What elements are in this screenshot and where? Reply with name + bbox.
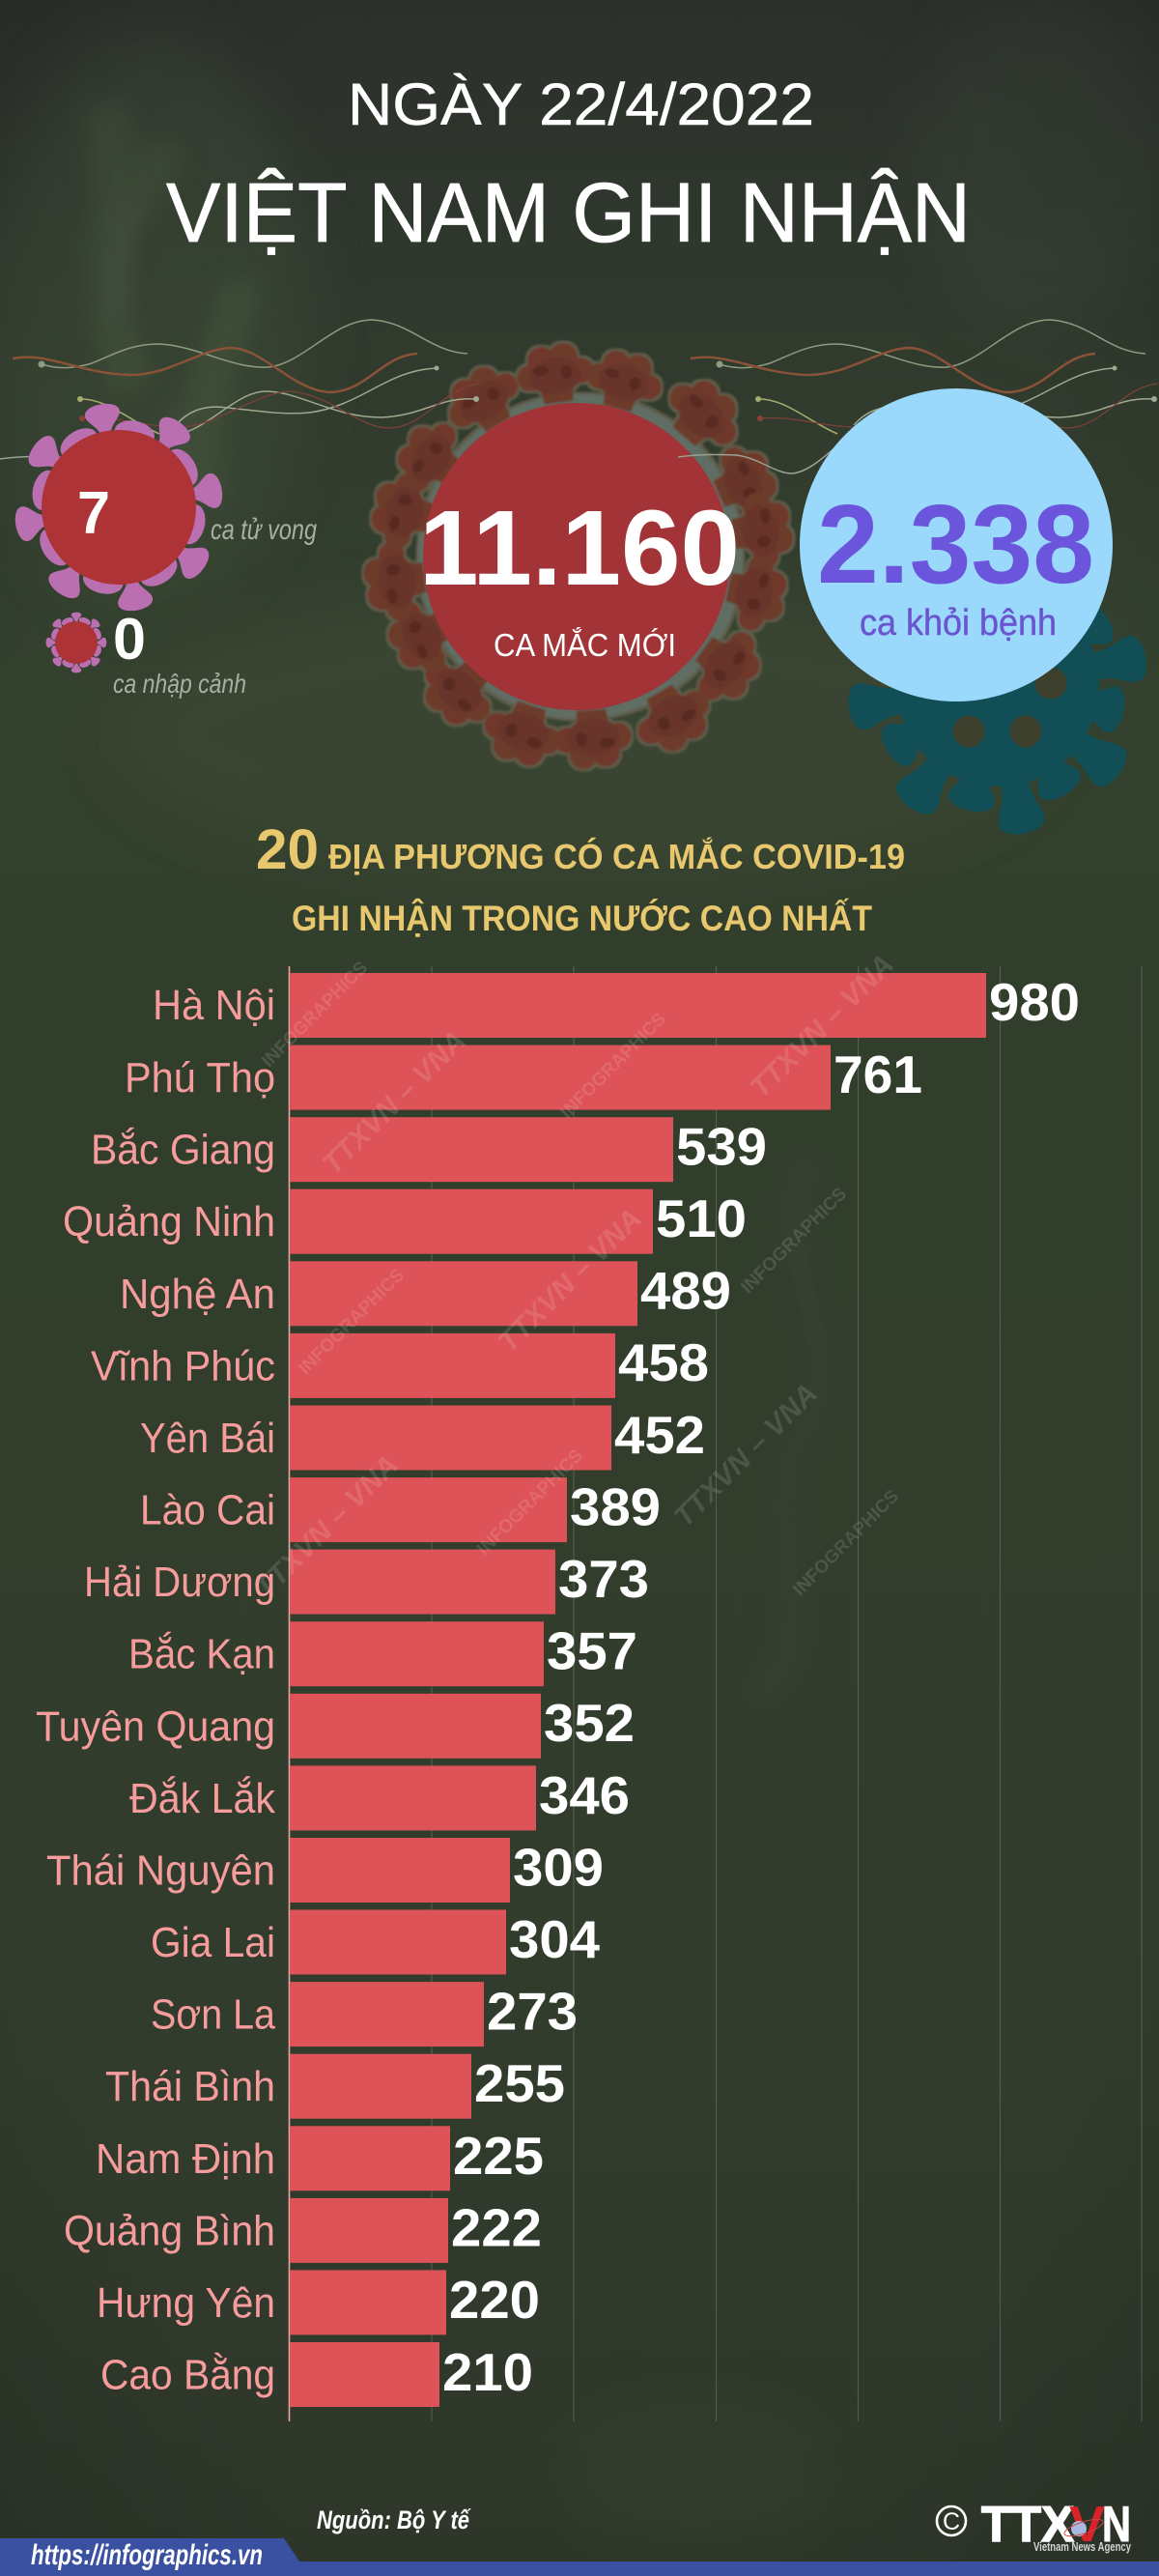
province labels: Thái Nguyên <box>46 1847 275 1894</box>
watermarks <box>249 949 903 1605</box>
province labels: Hải Dương <box>84 1560 275 1606</box>
watermarks: INFOGRAPHICS <box>737 1184 851 1298</box>
chart heading: ĐỊA PHƯƠNG CÓ CA MẮC COVID-19 <box>328 836 905 876</box>
province labels: Đắk Lắk <box>129 1775 275 1822</box>
province labels: Thái Bình <box>105 2064 275 2110</box>
province labels: Cao Bằng <box>100 2352 275 2398</box>
watermarks: TTXVN – VNA <box>317 1025 472 1181</box>
province labels: Bắc Giang <box>91 1127 275 1174</box>
province labels: Bắc Kạn <box>128 1631 275 1678</box>
bars <box>290 973 986 2407</box>
bar values: 222 <box>451 2197 542 2257</box>
province labels: Phú Thọ <box>125 1055 275 1102</box>
decorative wave lines right <box>691 320 1158 435</box>
recovered number: 2.338 <box>817 481 1094 607</box>
deaths number: 7 <box>77 480 110 547</box>
bar chart <box>36 949 1142 2421</box>
bar values: 210 <box>442 2342 533 2402</box>
province labels <box>36 983 276 2398</box>
decorative wave line over red circle <box>678 433 854 473</box>
province labels: Sơn La <box>151 1992 276 2039</box>
new cases label: CA MẮC MỚI <box>494 627 676 663</box>
bar values: 458 <box>618 1332 709 1392</box>
bar values: 357 <box>547 1621 637 1681</box>
bar values: 452 <box>614 1405 705 1465</box>
province labels: Lào Cai <box>140 1488 275 1534</box>
icon: large coronavirus illustration <box>360 339 797 774</box>
logo: TTXVN: C <box>943 2508 960 2535</box>
bar values: 346 <box>539 1765 630 1825</box>
bar values: 389 <box>570 1476 661 1536</box>
bar values: 980 <box>989 972 1080 1032</box>
watermarks: INFOGRAPHICS <box>473 1445 587 1560</box>
new cases number: 11.160 <box>419 489 740 608</box>
imported number: 0 <box>113 607 146 672</box>
bar values: 225 <box>453 2126 544 2186</box>
website url: https://infographics.vn <box>31 2539 263 2571</box>
bar values: 273 <box>487 1981 578 2041</box>
chart heading: 20 <box>256 818 319 881</box>
decorative wave lines left <box>13 320 480 435</box>
chart heading: GHI NHẬN TRONG NƯỚC CAO NHẤT <box>292 898 872 938</box>
bar values: 761 <box>834 1045 922 1104</box>
recovered label: ca khỏi bệnh <box>860 603 1057 644</box>
watermarks: INFOGRAPHICS <box>258 958 372 1072</box>
bar values: 255 <box>474 2053 565 2113</box>
bar values: 510 <box>656 1188 747 1248</box>
province labels: Vĩnh Phúc <box>91 1343 275 1389</box>
province labels: Quảng Bình <box>64 2208 275 2254</box>
panel: recovered <box>800 388 1113 701</box>
watermarks: TTXVN – VNA <box>493 1203 648 1359</box>
watermarks: TTXVN – VNA <box>249 1449 405 1605</box>
bar values: 309 <box>513 1838 604 1898</box>
watermarks: TTXVN – VNA <box>668 1378 824 1533</box>
watermarks: INFOGRAPHICS <box>556 1009 670 1123</box>
logo: TTXVN: N <box>1102 2497 1131 2553</box>
logo: TTXVN: Vietnam News Agency <box>1033 2540 1131 2554</box>
bar values: 539 <box>676 1117 767 1177</box>
decorative wave line far left <box>0 435 176 475</box>
logo: TTXVN: V <box>1069 2497 1105 2553</box>
bar values: 489 <box>640 1260 731 1320</box>
footer band <box>0 2538 1159 2576</box>
province labels: Nghệ An <box>120 1272 275 1318</box>
watermarks: INFOGRAPHICS <box>295 1265 409 1379</box>
icon: purple spiked virus <box>13 401 225 614</box>
province labels: Hà Nội <box>153 983 275 1029</box>
panel: imported cases <box>46 607 246 699</box>
icon: small purple virus <box>46 613 106 673</box>
watermarks: TTXVN – VNA <box>745 949 900 1104</box>
title: date line: NGÀY 22/4/2022 <box>348 72 814 137</box>
province labels: Yên Bái <box>140 1416 275 1462</box>
source note: Nguồn: Bộ Y tế <box>317 2505 471 2534</box>
icon: teal recovered virus <box>845 584 1150 838</box>
logo: TTXVN <box>937 2497 1131 2554</box>
red circle <box>423 403 730 710</box>
imported label: ca nhập cảnh <box>113 669 246 699</box>
province labels: Hưng Yên <box>97 2280 275 2327</box>
blue circle <box>800 388 1113 701</box>
title: main heading: VIỆT NAM GHI NHẬN <box>166 166 971 260</box>
province labels: Gia Lai <box>151 1920 275 1966</box>
province labels: Nam Định <box>96 2136 275 2183</box>
bar values: 352 <box>544 1693 635 1753</box>
bar values: 220 <box>449 2270 540 2330</box>
logo: TTXVN: TTX <box>981 2497 1074 2553</box>
bar values: 304 <box>509 1909 600 1969</box>
panel: deaths <box>13 401 317 614</box>
bar values <box>442 972 1080 2402</box>
province labels: Tuyên Quang <box>36 1703 275 1750</box>
province labels: Quảng Ninh <box>63 1199 275 1245</box>
panel: new cases <box>419 403 740 710</box>
bar values: 373 <box>558 1549 649 1609</box>
watermarks: INFOGRAPHICS <box>789 1486 903 1600</box>
chart heading <box>256 818 905 938</box>
deaths label: ca tử vong <box>211 514 317 546</box>
